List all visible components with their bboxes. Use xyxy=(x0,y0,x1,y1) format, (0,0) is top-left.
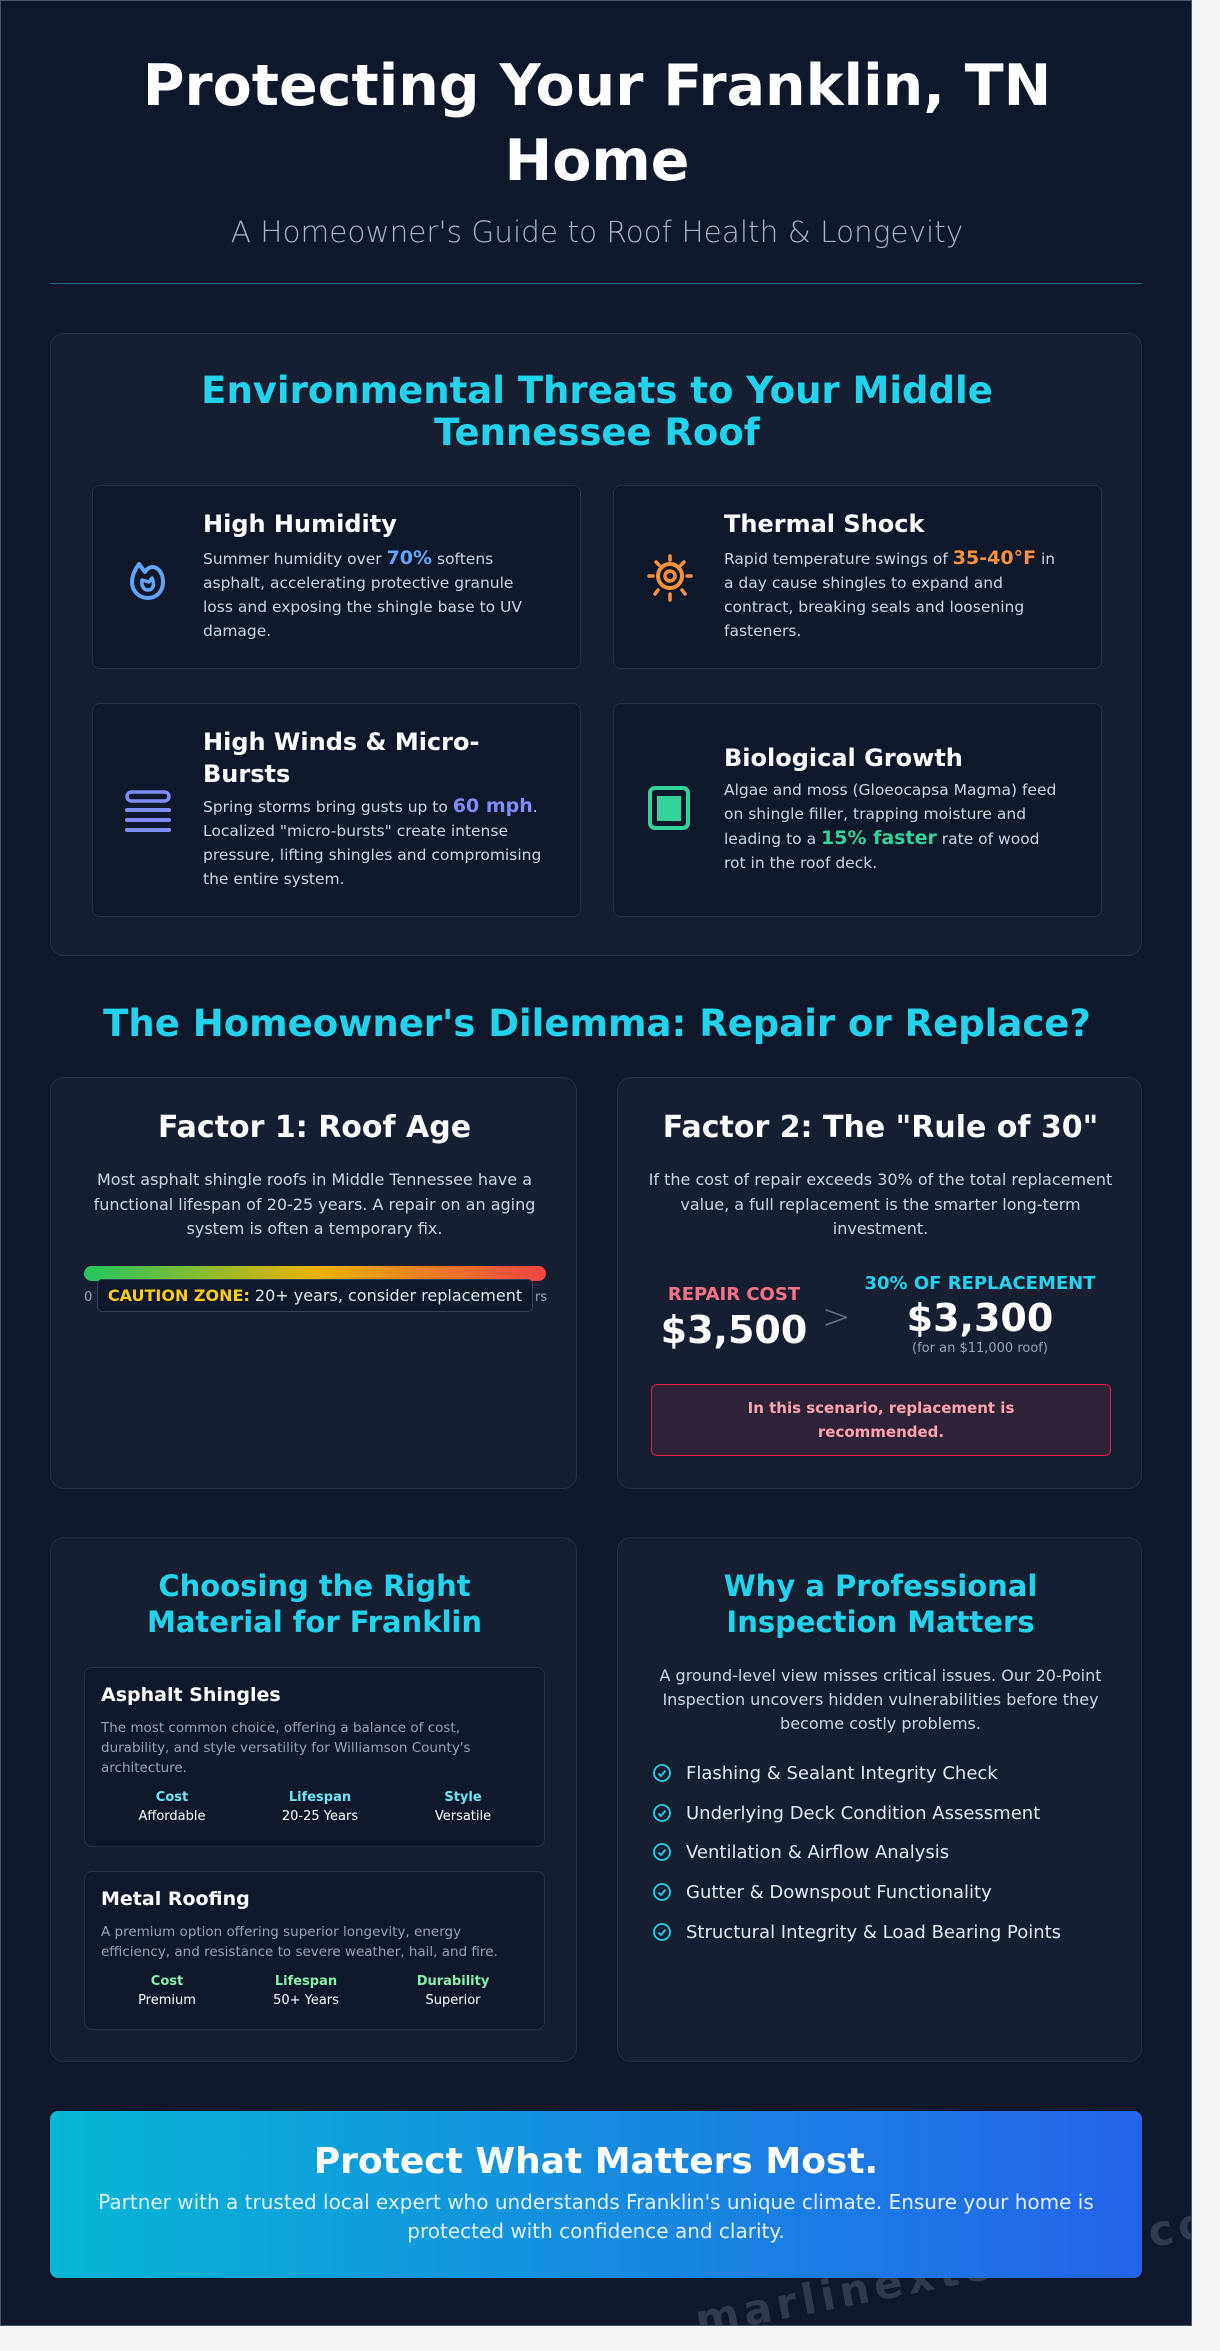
item: gutter: Gutter & Downspout Functionality xyxy=(686,1882,992,1902)
stats: metal xyxy=(138,1974,490,2008)
item: ventilation: Ventilation & Airflow Analysis xyxy=(686,1842,949,1862)
heading: inspection: Why a Professional xyxy=(724,1569,1037,1603)
callout: recommendation xyxy=(651,1384,1111,1456)
panel: factor 1 roof age: 0 xyxy=(84,1290,92,1305)
callout: caution zone xyxy=(97,1279,533,1312)
title: high winds: High Winds & Micro- xyxy=(203,728,479,756)
stats: metal: Cost xyxy=(151,1974,183,1989)
subtitle: A Homeowner's Guide to Roof Health & Longevity xyxy=(231,215,963,249)
CTA text: Partner with a trusted local expert who understands Franklin's unique climate. Ensure your home is protected with confidence and clarity. xyxy=(98,2190,1094,2243)
stat: repair cost xyxy=(661,1284,807,1352)
stats: asphalt: 20-25 Years xyxy=(282,1809,358,1824)
panel: professional inspection xyxy=(617,1537,1142,2062)
title: Home xyxy=(505,128,689,194)
stat: repair cost: REPAIR COST xyxy=(668,1284,800,1305)
stats: metal: Superior xyxy=(426,1993,480,2008)
card: asphalt shingles xyxy=(84,1667,545,1847)
CTA heading: Protect What Matters Most. xyxy=(314,2141,878,2182)
stats: asphalt: Affordable xyxy=(138,1809,206,1824)
text: inspection intro: A ground-level view misses critical issues. Our 20-Point Inspection uncovers hidden vulnerabilities before they become costly problems. xyxy=(660,1666,1101,1733)
title: asphalt: Asphalt Shingles xyxy=(101,1684,281,1706)
title: metal: Metal Roofing xyxy=(101,1888,250,1910)
callout: caution zone: CAUTION ZONE: 20+ years, consider replacement xyxy=(108,1286,522,1305)
title: biological growth: Biological Growth xyxy=(724,744,963,772)
icon: algae xyxy=(648,786,690,830)
stat: 30% of replacement: (for an $11,000 roof) xyxy=(912,1341,1048,1356)
stat: 30% of replacement: 30% OF REPLACEMENT xyxy=(864,1273,1096,1294)
panel: factor 1 roof age: rs xyxy=(535,1290,547,1305)
text: factor 2: If the cost of repair exceeds 30% of the total replacement value, a full replacement is the smarter long-term investment. xyxy=(649,1170,1112,1238)
text: humidity: Summer humidity over 70% softens asphalt, accelerating protective granule loss and exposing the shingle base to UV damage. xyxy=(203,547,522,640)
title: high winds xyxy=(203,728,479,788)
stats: metal: 50+ Years xyxy=(273,1993,339,2008)
gauge bar xyxy=(84,1266,546,1281)
CTA banner xyxy=(50,2111,1142,2278)
text: factor 1: Most asphalt shingle roofs in Middle Tennessee have a functional lifespan of 20-25 years. A repair on an aging system is often a temporary fix. xyxy=(94,1170,535,1238)
heading: factor 2: Factor 2: The "Rule of 30" xyxy=(663,1110,1098,1145)
card: thermal shock xyxy=(613,485,1102,669)
card: biological growth xyxy=(613,703,1102,917)
stats: metal: Durability xyxy=(417,1974,489,1989)
text: asphalt: The most common choice, offering a balance of cost, durability, and style versatility for Williamson County's architecture. xyxy=(101,1720,471,1776)
panel: materials xyxy=(50,1537,577,2062)
panel: factor 2 rule of 30 xyxy=(617,1077,1142,1489)
heading: materials xyxy=(147,1569,482,1639)
stats: metal: Lifespan xyxy=(275,1974,337,1989)
stats: asphalt: Lifespan xyxy=(289,1790,351,1805)
heading: inspection: Inspection Matters xyxy=(726,1605,1035,1639)
stat: 30% of replacement xyxy=(864,1273,1096,1356)
text: thermal: Rapid temperature swings of 35-40°F in a day cause shingles to expand and contract, breaking seals and loosening fasteners. xyxy=(724,547,1055,640)
card: metal roofing xyxy=(84,1871,545,2030)
heading: materials: Material for Franklin xyxy=(147,1605,482,1639)
heading: materials: Choosing the Right xyxy=(158,1569,471,1603)
heading: environmental threats: Tennessee Roof xyxy=(434,411,760,454)
card: high winds xyxy=(92,703,581,917)
arrow: greater than: > xyxy=(822,1297,850,1337)
heading: environmental threats xyxy=(201,369,993,454)
text: metal: A premium option offering superior longevity, energy efficiency, and resistance to severe weather, hail, and fire. xyxy=(101,1924,498,1960)
text: biological: Algae and moss (Gloeocapsa Magma) feed on shingle filler, trapping moisture and leading to a 15% faster rate of wood rot in the roof deck. xyxy=(724,781,1056,872)
heading: factor 1: Factor 1: Roof Age xyxy=(158,1110,471,1145)
title xyxy=(143,53,1051,194)
panel: factor 1 roof age xyxy=(50,1077,577,1489)
stat: repair cost: $3,500 xyxy=(661,1308,807,1352)
item: deck: Underlying Deck Condition Assessment xyxy=(686,1802,1040,1824)
title: high winds: Bursts xyxy=(203,760,290,788)
callout: recommendation: In this scenario, replacement is xyxy=(748,1399,1014,1417)
item: flashing: Flashing & Sealant Integrity Check xyxy=(686,1762,998,1784)
stat: 30% of replacement: $3,300 xyxy=(907,1296,1053,1340)
checklist xyxy=(653,1762,1061,1942)
icon: humidity xyxy=(130,562,165,600)
icon: wind lines xyxy=(125,790,171,832)
title: Protecting Your Franklin, TN xyxy=(143,53,1051,119)
stats: asphalt: Cost xyxy=(156,1790,188,1805)
panel: environmental threats xyxy=(50,333,1142,956)
heading: inspection xyxy=(724,1569,1037,1639)
text: winds: Spring storms bring gusts up to 60 mph. Localized "micro-bursts" create intense pressure, lifting shingles and compromising the entire system. xyxy=(203,795,541,888)
item: structural: Structural Integrity & Load Bearing Points xyxy=(686,1922,1061,1942)
heading: environmental threats: Environmental Threats to Your Middle xyxy=(201,369,993,412)
stats: metal: Premium xyxy=(138,1993,196,2008)
stats: asphalt: Versatile xyxy=(435,1809,491,1824)
title: high humidity: High Humidity xyxy=(203,510,397,538)
stats: asphalt xyxy=(138,1790,491,1824)
section heading: dilemma: The Homeowner's Dilemma: Repair or Replace? xyxy=(103,1002,1091,1045)
callout: recommendation: recommended. xyxy=(818,1423,944,1441)
icon: sun xyxy=(647,554,693,602)
card: high humidity xyxy=(92,485,581,669)
stats: asphalt: Style xyxy=(444,1790,482,1805)
title: thermal shock: Thermal Shock xyxy=(724,510,924,538)
